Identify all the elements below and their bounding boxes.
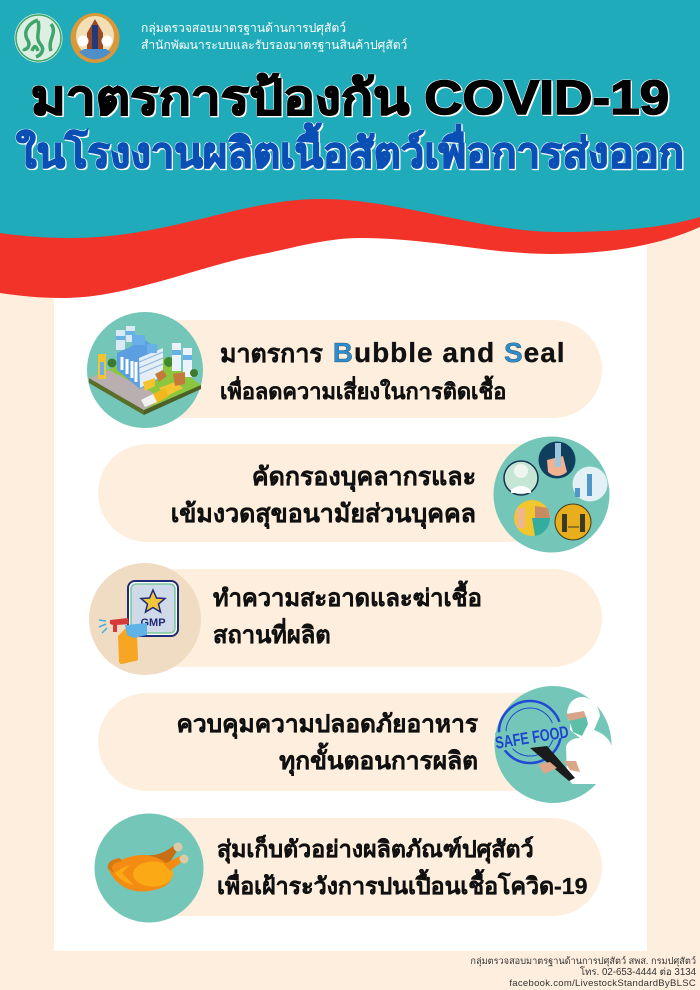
footer credits: facebook.com/LivestockStandardByBLSC: [509, 978, 696, 989]
text: เข้มงวดสุขอนามัยส่วนบุคคล: [171, 500, 476, 528]
icon: GMP spray: GMP: [140, 617, 166, 629]
icon: screening group: [494, 436, 610, 552]
pill background 1: [130, 320, 602, 418]
text: ควบคุมความปลอดภัยอาหาร: [176, 711, 478, 738]
pill background 4: [98, 693, 560, 791]
white content panel: [54, 200, 647, 951]
icon: GMP spray: [89, 563, 201, 675]
pill background 3: [130, 569, 602, 667]
text: [176, 711, 478, 776]
heading and text: เพื่อลดความเสี่ยงในการติดเชื้อ: [220, 379, 506, 404]
footer credits: กลุ่มตรวจสอบมาตรฐานด้านการปศุสัตว์ สพส. กรมปศุสัตว์: [470, 956, 696, 966]
organisation name: กลุ่มตรวจสอบมาตรฐานด้านการปศุสัตว์: [141, 21, 346, 35]
panel: screening: [98, 436, 610, 552]
footer credits: [470, 956, 696, 989]
panel: bubble and seal: [87, 312, 602, 428]
panel: cleaning: [89, 563, 602, 675]
icon: safe food inspector: SAFE FOOD: [494, 722, 570, 753]
text: ทำความสะอาดและฆ่าเชื้อ: [213, 586, 482, 612]
text: [213, 580, 482, 649]
text: ทุกขั้นตอนการผลิต: [279, 748, 478, 775]
logo: bureau seal: [70, 13, 120, 63]
heading and text: [220, 337, 566, 404]
text: คัดกรองบุคลากรและ: [252, 463, 476, 491]
organisation name: สำนักพัฒนาระบบและรับรองมาตรฐานสินค้าปศุสัตว์: [141, 38, 407, 52]
text: สถานที่ผลิต: [213, 623, 331, 649]
icon: roast chicken: [94, 814, 204, 922]
header wave background: [0, 0, 700, 298]
icon: factory: [87, 312, 203, 428]
pill background 2: [98, 444, 560, 542]
pill background 5: [130, 818, 602, 916]
title line 2: ในโรงงานผลิตเนื้อสัตว์เพื่อการส่งออก: [16, 130, 684, 176]
panel: food safety: [98, 686, 612, 803]
panel: sampling: [94, 814, 602, 922]
organisation name: [141, 21, 407, 52]
logo: department seal: [14, 14, 62, 62]
heading and text: มาตรการ Bubble and Seal: [220, 337, 566, 368]
title line 1: มาตรการป้องกัน COVID-19: [31, 72, 669, 125]
icon: safe food inspector: [494, 686, 612, 803]
text: [217, 834, 588, 899]
text: เพื่อเฝ้าระวังการปนเปื้อนเชื้อโควิด-19: [217, 873, 588, 899]
text: [171, 463, 476, 529]
footer credits: โทร. 02-653-4444 ต่อ 3134: [580, 967, 696, 978]
text: สุ่มเก็บตัวอย่างผลิตภัณฑ์ปศุสัตว์: [217, 836, 534, 862]
